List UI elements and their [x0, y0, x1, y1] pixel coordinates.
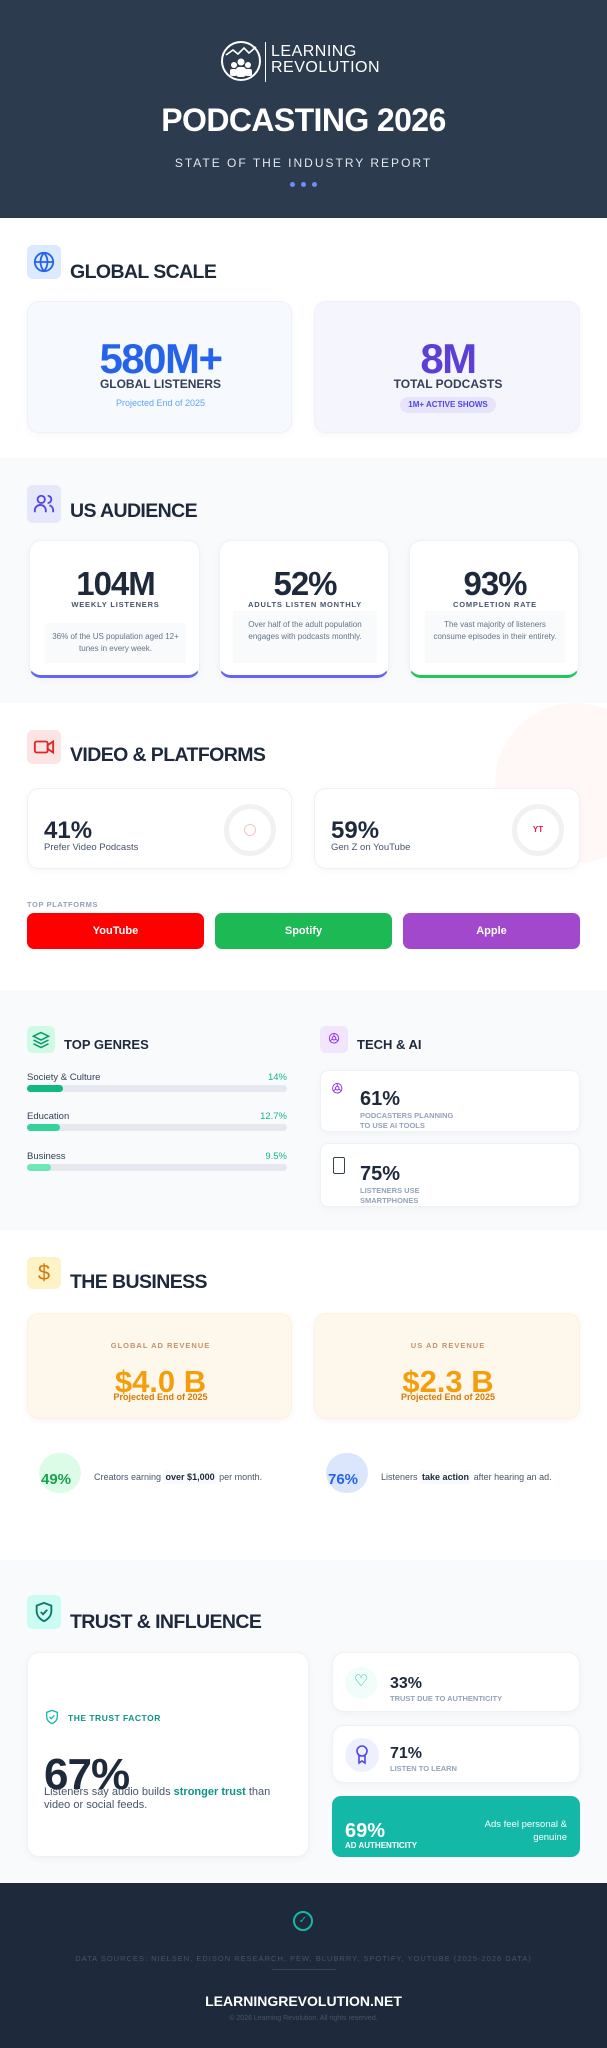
- icon: check circle: ✓: [299, 1915, 307, 1926]
- card: smartphones: LISTENERS USE: [360, 1186, 420, 1195]
- icon: check circle: [293, 1911, 313, 1931]
- card: smartphones: SMARTPHONES: [360, 1196, 418, 1205]
- section: video & platforms: [0, 703, 607, 990]
- card: weekly listeners: WEEKLY LISTENERS: [71, 600, 160, 609]
- sources: DATA SOURCES: NIELSEN, EDISON RESEARCH, PEW, BLUBRRY, SPOTIFY, YOUTUBE (2025-2026 DATA): [75, 1954, 532, 1963]
- icon: users: [27, 485, 61, 523]
- card: global listeners: GLOBAL LISTENERS: [100, 377, 221, 391]
- card: trust authenticity: 33%: [390, 1675, 422, 1692]
- card: ad authenticity: Ads feel personal & genuine: [485, 1819, 567, 1843]
- card: trust factor: THE TRUST FACTOR: [68, 1713, 161, 1723]
- card: total podcasts: [314, 301, 580, 433]
- card: weekly listeners: 36% of the US population aged 12+ tunes in every week.: [52, 632, 179, 653]
- card: us ad revenue: $2.3 B: [402, 1364, 494, 1399]
- icon: brain: ꔮ: [328, 1030, 340, 1048]
- card: completion rate: [409, 540, 579, 678]
- section: trust & influence: [0, 1560, 607, 1883]
- card: global listeners: Projected End of 2025: [116, 398, 205, 408]
- heading: US AUDIENCE: [70, 500, 197, 522]
- card: global listeners: 580M+: [99, 335, 222, 382]
- icon: dollar: [27, 1257, 61, 1289]
- subtitle: STATE OF THE INDUSTRY REPORT: [175, 156, 432, 170]
- card: global ad revenue: $4.0 B: [115, 1364, 206, 1399]
- card: ai tools: 61%: [360, 1088, 400, 1110]
- card: weekly listeners: [29, 540, 200, 678]
- section: us audience: [0, 458, 607, 703]
- title: PODCASTING 2026: [161, 102, 446, 138]
- panel: tech & ai: TECH & AI: [357, 1037, 422, 1052]
- panel: top genres: 12.7%: [260, 1111, 287, 1122]
- section: genres & tech: [0, 990, 607, 1230]
- card: total podcasts: 1M+ ACTIVE SHOWS: [408, 400, 488, 409]
- card: adults monthly: 52%: [273, 565, 337, 602]
- stat: creators earning: [39, 1453, 262, 1493]
- label: top platforms: TOP PLATFORMS: [27, 900, 98, 909]
- icon: globe: [27, 245, 61, 279]
- card: ad authenticity: 69%: [345, 1820, 385, 1842]
- icon: video: [27, 730, 61, 764]
- panel: top genres: Society & Culture: [27, 1072, 100, 1083]
- card: global ad revenue: [27, 1313, 292, 1419]
- icon: dollar: $: [38, 1260, 50, 1285]
- header: [0, 0, 607, 218]
- card: trust factor: Listeners say audio builds stronger trust than video or social feeds.: [44, 1786, 270, 1811]
- card: completion rate: 93%: [463, 565, 527, 602]
- card: trust authenticity: TRUST DUE TO AUTHENTICITY: [390, 1694, 502, 1703]
- platform buttons: YouTube: [93, 925, 138, 937]
- heading: VIDEO & PLATFORMS: [70, 744, 265, 766]
- panel: top genres: Education: [27, 1111, 69, 1122]
- card: total podcasts: 8M: [420, 335, 476, 382]
- card: adults monthly: Over half of the adult population engages with podcasts monthly.: [248, 620, 362, 641]
- heading: THE BUSINESS: [70, 1271, 207, 1293]
- panel: top genres: TOP GENRES: [64, 1037, 149, 1052]
- platform buttons: Spotify: [285, 925, 322, 937]
- panel: top genres: [27, 1026, 287, 1171]
- card: listen to learn: [332, 1725, 580, 1783]
- card: listen to learn: LISTEN TO LEARN: [390, 1764, 457, 1773]
- stat: creators earning: Creators earning over $1,000 per month.: [94, 1472, 262, 1482]
- card: weekly listeners: 104M: [76, 565, 155, 602]
- card: gen z youtube: Gen Z on YouTube: [331, 842, 410, 853]
- platform buttons: [27, 913, 580, 949]
- card: trust factor: [27, 1652, 309, 1857]
- card: gen z youtube: 59%: [331, 817, 379, 844]
- card: adults monthly: [219, 540, 389, 678]
- card: adults monthly: ADULTS LISTEN MONTHLY: [248, 600, 362, 609]
- card: ad authenticity: AD AUTHENTICITY: [345, 1841, 417, 1850]
- icon: shield: [27, 1595, 61, 1629]
- dots: [290, 182, 317, 187]
- card: ai tools: PODCASTERS PLANNING: [360, 1111, 453, 1120]
- copyright: © 2026 Learning Revolution. All rights reserved.: [229, 2015, 378, 2022]
- card: gen z youtube: [314, 788, 580, 869]
- card: completion rate: The vast majority of listeners consume episodes in their entirety.: [433, 620, 557, 641]
- footer: [0, 1883, 607, 2048]
- card: trust factor: 67%: [44, 1750, 129, 1799]
- card: listen to learn: 71%: [390, 1745, 422, 1762]
- icon: layers: [27, 1026, 55, 1053]
- card: ai tools: ꔮ: [331, 1081, 343, 1098]
- heading: TRUST & INFLUENCE: [70, 1611, 261, 1633]
- logo: LEARNING: [271, 43, 357, 60]
- card: prefer video: [27, 788, 292, 869]
- card: us ad revenue: Projected End of 2025: [401, 1392, 495, 1402]
- stat: creators earning: 49%: [41, 1471, 71, 1488]
- card: us ad revenue: US AD REVENUE: [411, 1341, 485, 1350]
- stat: take action: 76%: [328, 1471, 358, 1488]
- icon: brain: [320, 1026, 348, 1053]
- card: ai tools: TO USE AI TOOLS: [360, 1121, 425, 1130]
- stat: take action: [326, 1453, 552, 1493]
- section: global scale: [0, 218, 607, 458]
- panel: top genres: Business: [27, 1151, 66, 1162]
- card: total podcasts: TOTAL PODCASTS: [394, 377, 502, 391]
- heading: GLOBAL SCALE: [70, 261, 216, 283]
- panel: tech & ai: [320, 1026, 580, 1207]
- panel: top genres: 9.5%: [265, 1151, 287, 1162]
- card: ai tools: [320, 1070, 580, 1132]
- logo: [221, 41, 380, 82]
- card: completion rate: COMPLETION RATE: [453, 600, 537, 609]
- card: smartphones: 75%: [360, 1163, 400, 1185]
- card: ad authenticity: [332, 1796, 580, 1857]
- website: LEARNINGREVOLUTION.NET: [205, 1993, 402, 2009]
- card: prefer video: 41%: [44, 817, 92, 844]
- section: the business: [0, 1230, 607, 1560]
- card: trust authenticity: [332, 1652, 580, 1712]
- card: gen z youtube: YT: [533, 825, 543, 834]
- card: global ad revenue: Projected End of 2025: [113, 1392, 208, 1402]
- card: global ad revenue: GLOBAL AD REVENUE: [111, 1341, 210, 1350]
- panel: top genres: 14%: [268, 1072, 287, 1083]
- card: global listeners: [27, 301, 292, 433]
- stat: take action: Listeners take action after hearing an ad.: [381, 1472, 552, 1482]
- card: us ad revenue: [314, 1313, 580, 1419]
- card: smartphones: [320, 1143, 580, 1207]
- card: prefer video: Prefer Video Podcasts: [44, 842, 138, 853]
- logo: REVOLUTION: [271, 59, 380, 76]
- card: trust authenticity: ♡: [354, 1673, 368, 1690]
- platform buttons: Apple: [476, 925, 507, 937]
